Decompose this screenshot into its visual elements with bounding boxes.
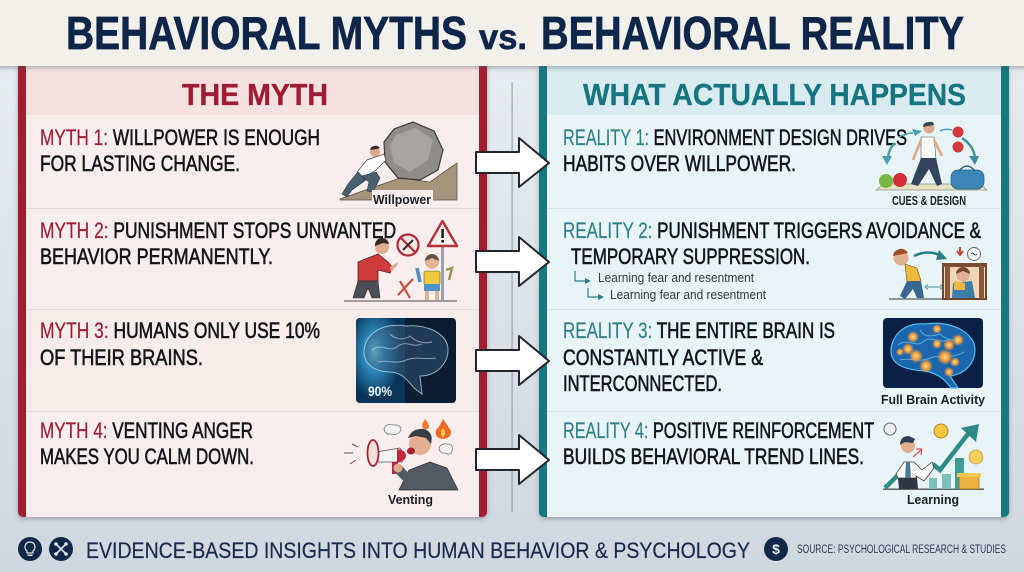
reality 3 second line: CONSTANTLY ACTIVE & bbox=[563, 345, 763, 370]
icon: source badge bbox=[764, 537, 788, 561]
sub-point arrows and notes: Learning fear and resentment bbox=[610, 288, 766, 302]
icon: source badge: $ bbox=[772, 541, 780, 557]
icon: man pushing boulder, willpower bbox=[340, 122, 457, 207]
reality 1 text: REALITY 1: ENVIRONMENT DESIGN DRIVES bbox=[563, 125, 907, 150]
sub-point arrows and notes bbox=[575, 271, 766, 302]
reality 1 second line: HABITS OVER WILLPOWER. bbox=[563, 151, 796, 176]
reality 4 text: REALITY 4: POSITIVE REINFORCEMENT bbox=[563, 418, 874, 443]
arrow: myth 2 to reality 2 bbox=[476, 237, 549, 286]
icon: venting with megaphone bbox=[344, 419, 458, 507]
reality 3 third line: INTERCONNECTED. bbox=[563, 371, 722, 396]
myth 4 text: MYTH 4: VENTING ANGER bbox=[40, 418, 253, 443]
title banner bbox=[0, 0, 1024, 66]
icon: full brain activity bbox=[881, 318, 986, 407]
panel: the myth bbox=[18, 60, 487, 517]
icon: man scolding child bbox=[344, 221, 457, 302]
cues and design label: CUES & DESIGN bbox=[892, 193, 966, 208]
panel: what actually happens bbox=[539, 60, 1009, 517]
full brain label: Full Brain Activity bbox=[881, 392, 986, 407]
sub-point arrows and notes: Learning fear and resentment bbox=[598, 271, 754, 285]
title: vs. bbox=[479, 18, 527, 57]
icon: positive reinforcement trend bbox=[883, 423, 984, 507]
reality heading: WHAT ACTUALLY HAPPENS bbox=[583, 77, 966, 112]
myth 3 second line: OF THEIR BRAINS. bbox=[40, 345, 203, 370]
reality 3 text: REALITY 3: THE ENTIRE BRAIN IS bbox=[563, 318, 835, 343]
myth heading: THE MYTH bbox=[182, 77, 328, 112]
icon: network bbox=[49, 537, 73, 561]
footer tagline: EVIDENCE-BASED INSIGHTS INTO HUMAN BEHAVIOR & PSYCHOLOGY bbox=[86, 538, 750, 563]
myth 1 text: MYTH 1: WILLPOWER IS ENOUGH bbox=[40, 125, 320, 150]
icon: cues and design bbox=[876, 122, 987, 208]
arrow: myth 4 to reality 4 bbox=[476, 435, 549, 484]
arrow: myth 3 to reality 3 bbox=[476, 336, 549, 385]
icon: brain 90 percent bbox=[356, 318, 456, 403]
myth 1 second line: FOR LASTING CHANGE. bbox=[40, 151, 240, 176]
myth 2 text: MYTH 2: PUNISHMENT STOPS UNWANTED bbox=[40, 218, 396, 243]
footer bbox=[18, 537, 1006, 563]
venting label: Venting bbox=[388, 492, 433, 507]
title bbox=[66, 7, 964, 59]
learning label: Learning bbox=[907, 492, 959, 507]
icon: light bulb bbox=[18, 537, 42, 561]
willpower label: Willpower bbox=[373, 192, 431, 207]
myth 3 text: MYTH 3: HUMANS ONLY USE 10% bbox=[40, 318, 320, 343]
myth 4 second line: MAKES YOU CALM DOWN. bbox=[40, 444, 254, 469]
center divider bbox=[512, 82, 513, 512]
myth 2 second line: BEHAVIOR PERMANENTLY. bbox=[40, 244, 273, 269]
reality 4 second line: BUILDS BEHAVIORAL TREND LINES. bbox=[563, 444, 864, 469]
arrow: myth 1 to reality 1 bbox=[476, 138, 549, 187]
reality 2 second line: TEMPORARY SUPPRESSION. bbox=[571, 244, 810, 269]
title: BEHAVIORAL MYTHS bbox=[66, 7, 467, 59]
icon: child avoiding and hiding bbox=[889, 247, 987, 300]
percent label: 90% bbox=[368, 384, 392, 399]
